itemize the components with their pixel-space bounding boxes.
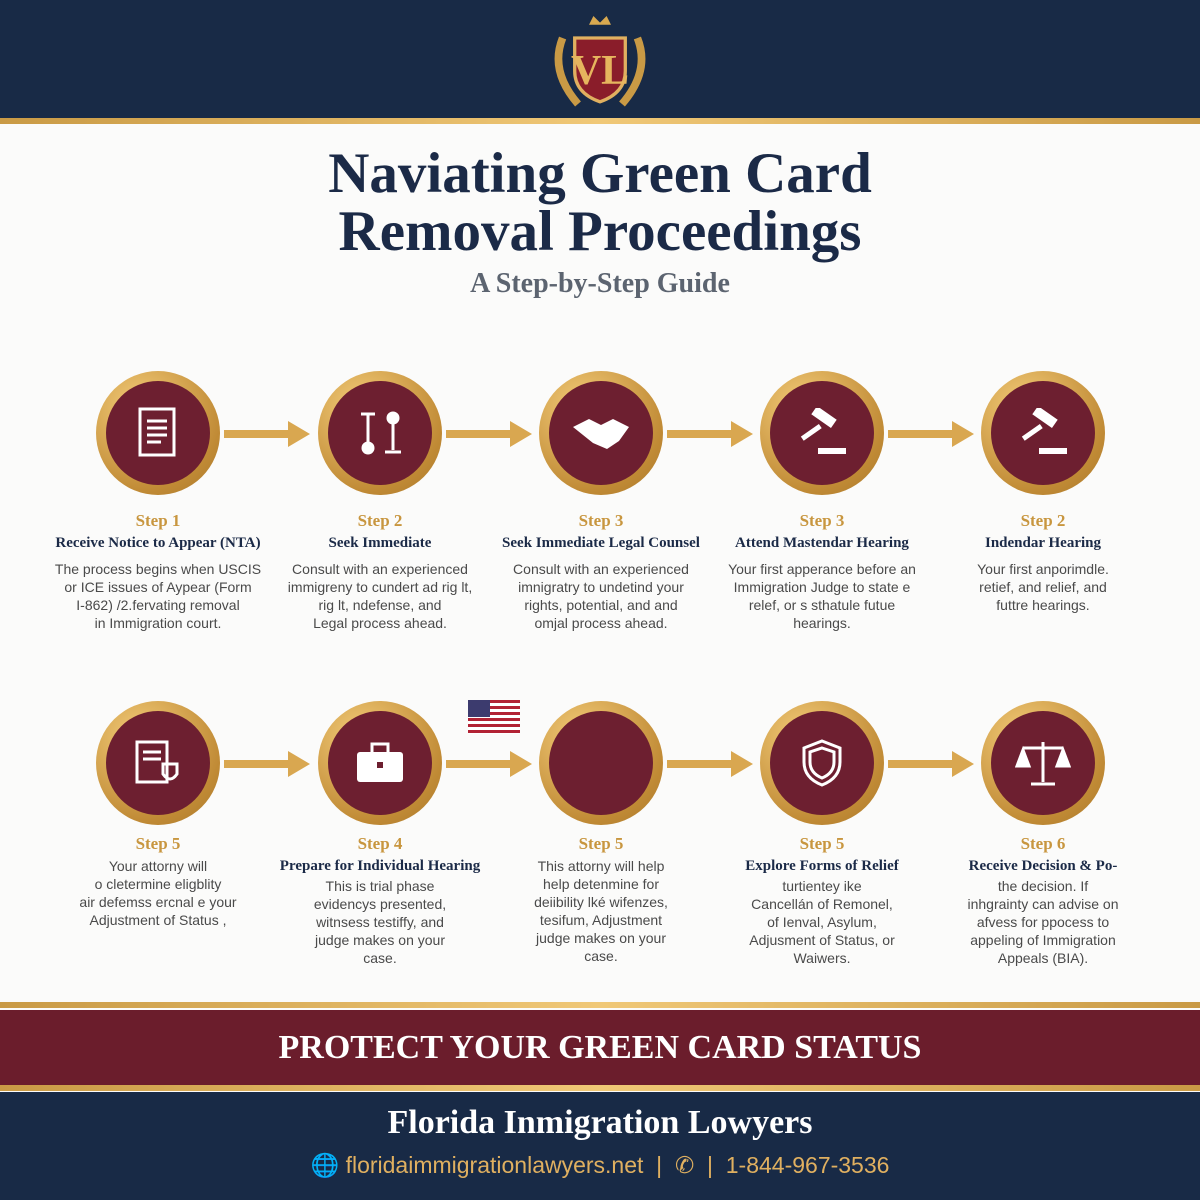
row 2 texts: evidencys presented, bbox=[314, 896, 446, 912]
row 2 texts: Explore Forms of Relief bbox=[745, 858, 899, 874]
row 1 texts: Receive Notice to Appear (NTA) bbox=[55, 535, 261, 551]
logo crest bbox=[554, 16, 646, 106]
row 1 texts: retief, and relief, and bbox=[979, 579, 1107, 595]
row 2 texts: the decision. If bbox=[998, 878, 1088, 894]
row 2 texts: Receive Decision & Po- bbox=[969, 858, 1117, 874]
row 1 arrows bbox=[224, 421, 974, 447]
row 1 texts: Step 2 bbox=[1021, 511, 1065, 530]
row 1 texts: Your first apperance before an bbox=[728, 561, 916, 577]
subtitle: A Step-by-Step Guide bbox=[470, 268, 730, 299]
gold line above banner bbox=[0, 1002, 1200, 1008]
contact line: 🌐 floridaimmigrationlawyers.net | ✆ | 1-844-967-3536 bbox=[311, 1152, 889, 1178]
icon: briefcase bbox=[318, 701, 442, 825]
row 1 texts: Consult with an experienced bbox=[513, 561, 689, 577]
row 2 texts: witnsess testiffy, and bbox=[316, 914, 444, 930]
footer bbox=[0, 1092, 1200, 1200]
row 2 texts: This attorny will help bbox=[538, 858, 664, 874]
firm name: Florida Inmigration Lowyers bbox=[388, 1104, 812, 1141]
icon: handshake bbox=[539, 371, 663, 495]
logo crest: VL bbox=[571, 48, 629, 94]
icon: gavel bbox=[760, 371, 884, 495]
row 2 texts: Step 6 bbox=[1021, 834, 1065, 853]
row 2 texts: turtientey ike bbox=[782, 878, 862, 894]
icon: flag bbox=[468, 700, 520, 734]
row 1 texts: immigreny to cundert ad rig lt, bbox=[288, 579, 472, 595]
row 1 texts: relef, or s sthatule futue bbox=[749, 597, 895, 613]
row 2 texts: Step 4 bbox=[358, 834, 402, 853]
row 1 texts: Immigration Judge to state e bbox=[734, 579, 910, 595]
icon: document shield bbox=[96, 701, 220, 825]
icon: legal symbol bbox=[318, 371, 442, 495]
row 2 texts: help detenmine for bbox=[543, 876, 659, 892]
row 2 texts: Adjustment of Status , bbox=[90, 912, 226, 928]
title bbox=[328, 142, 872, 263]
gold line below banner bbox=[0, 1085, 1200, 1091]
row 1 texts: Step 2 bbox=[358, 511, 402, 530]
icon: shield bbox=[760, 701, 884, 825]
banner: PROTECT YOUR GREEN CARD STATUS bbox=[279, 1029, 921, 1066]
row 2 texts: deiibility lké wifenzes, bbox=[534, 894, 668, 910]
row 2 texts: Step 5 bbox=[800, 834, 844, 853]
row 1 texts: The process begins when USCIS bbox=[55, 561, 261, 577]
row 2 texts: o cletermine eligblity bbox=[95, 876, 221, 892]
row 2 texts: Waiwers. bbox=[793, 950, 851, 966]
row 1 texts: Indendar Hearing bbox=[985, 535, 1101, 551]
row 2 texts: Appeals (BIA). bbox=[998, 950, 1088, 966]
row 2 texts: of Ienval, Asylum, bbox=[767, 914, 877, 930]
row 2 arrows bbox=[224, 751, 974, 777]
row 2 texts: inhgrainty can advise on bbox=[968, 896, 1118, 912]
row 1 texts: in Immigration court. bbox=[95, 615, 221, 631]
row 1 texts: Step 3 bbox=[800, 511, 844, 530]
row 2 texts: This is trial phase bbox=[326, 878, 434, 894]
row 2 texts: Prepare for Individual Hearing bbox=[280, 858, 480, 874]
row 2 texts: judge makes on your bbox=[536, 930, 666, 946]
row 2 texts: Step 5 bbox=[136, 834, 180, 853]
icon: empty circle bbox=[539, 701, 663, 825]
row 1 texts: rights, potential, and and bbox=[524, 597, 678, 613]
row 1 texts: rig lt, ndefense, and bbox=[318, 597, 441, 613]
row 1 texts: or ICE issues of Aypear (Form bbox=[64, 579, 252, 595]
banner bbox=[0, 1010, 1200, 1086]
gold stripe bbox=[0, 118, 1200, 124]
row 1 texts: Your first anporimdle. bbox=[977, 561, 1109, 577]
row 1 texts: Attend Mastendar Hearing bbox=[735, 535, 909, 551]
row 1 texts: Step 1 bbox=[136, 511, 180, 530]
row 2 texts: Adjusment of Status, or bbox=[749, 932, 895, 948]
row 1 texts: imnigratry to undetind your bbox=[518, 579, 684, 595]
row 2 texts: appeling of Immigration bbox=[970, 932, 1116, 948]
row 1 texts: Step 3 bbox=[579, 511, 623, 530]
row 2 texts: Your attorny will bbox=[109, 858, 207, 874]
row 2 texts: tesifum, Adjustment bbox=[540, 912, 662, 928]
row 2 texts: afvess for ppocess to bbox=[977, 914, 1109, 930]
row 1 texts bbox=[55, 511, 1109, 631]
title: Naviating Green Card bbox=[328, 142, 872, 205]
row 2 texts: Step 5 bbox=[579, 834, 623, 853]
row 2 texts: case. bbox=[584, 948, 618, 964]
icon: gavel 2 bbox=[981, 371, 1105, 495]
row 2 texts: case. bbox=[363, 950, 397, 966]
row 2 texts: air defemss ercnal e your bbox=[79, 894, 237, 910]
row 1 circles bbox=[96, 371, 1105, 495]
row 2 texts bbox=[79, 834, 1118, 966]
row 1 texts: Seek Immediate bbox=[329, 535, 431, 551]
row 2 texts: Cancellán of Remonel, bbox=[751, 896, 893, 912]
row 1 texts: omjal process ahead. bbox=[534, 615, 668, 631]
row 1 texts: futtre hearings. bbox=[996, 597, 1090, 613]
row 2 texts: judge makes on your bbox=[315, 932, 445, 948]
title: Removal Proceedings bbox=[339, 200, 861, 263]
header bar bbox=[0, 0, 1200, 118]
row 1 texts: I-862) /2.fervating removal bbox=[76, 597, 240, 613]
row 2 circles bbox=[96, 701, 1105, 825]
icon: document bbox=[96, 371, 220, 495]
row 1 texts: Seek Immediate Legal Counsel bbox=[502, 535, 700, 551]
row 1 texts: hearings. bbox=[793, 615, 851, 631]
row 1 texts: Consult with an experienced bbox=[292, 561, 468, 577]
row 1 texts: Legal process ahead. bbox=[313, 615, 447, 631]
icon: scales bbox=[981, 701, 1105, 825]
